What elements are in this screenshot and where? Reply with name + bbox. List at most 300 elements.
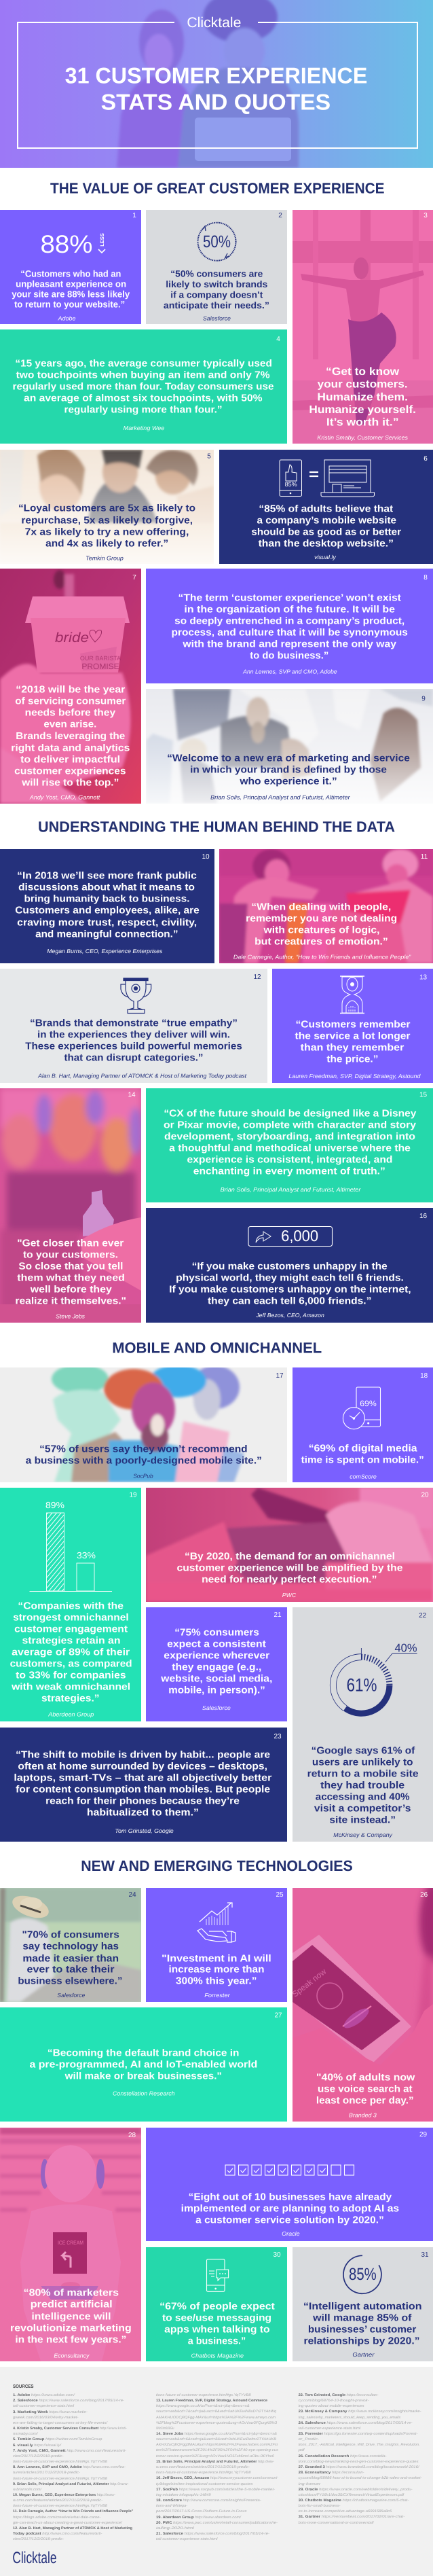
card number: 20 xyxy=(421,1492,429,1499)
panel: quote 23 xyxy=(0,1728,287,1842)
quote xyxy=(159,2302,275,2347)
card number: 17 xyxy=(276,1372,284,1380)
quote: so deeply entrenched in a company’s product, xyxy=(174,616,404,627)
quote xyxy=(169,1262,411,1307)
quote: “75% consumers xyxy=(174,1628,259,1639)
sources column 1: tions-future-of-customer-experience.html#gs.YqTYVB8 xyxy=(13,2477,107,2481)
quote: an average of almost six touchpoints, with 50% xyxy=(24,393,263,404)
quote: and 4x as likely to refer.” xyxy=(45,538,168,549)
panel: quote 26 with voice search phone photo xyxy=(290,1882,433,2122)
panel: stat 18 xyxy=(293,1367,433,1482)
quote: regularly using more than four.” xyxy=(64,405,223,416)
quote: with creatures of logic, xyxy=(263,925,380,936)
quote: “Welcome to a new era of marketing and service xyxy=(167,753,410,764)
sources column 2 xyxy=(155,2393,278,2541)
quote: 7x as likely to try a new offering, xyxy=(25,526,189,537)
quote: predict artificial xyxy=(31,2300,113,2310)
heading: new and emerging technologies: NEW AND EMERGING TECHNOLOGIES xyxy=(81,1857,353,1874)
card number: 24 xyxy=(128,1891,136,1899)
title: 31 CUSTOMER EXPERIENCE xyxy=(65,63,367,88)
attribution: Andy Yost, CMO, Gannett xyxy=(29,793,100,800)
attribution: Tom Grinsted, Google xyxy=(115,1827,174,1834)
card number: 4 xyxy=(276,336,280,343)
sources column 3: 31. Gartner https://venturebeat.com/2017/02/01/are-chat- xyxy=(299,2515,405,2519)
quote: It’s worth it.” xyxy=(326,416,399,428)
attribution: Brian Solis, Principal Analyst and Futurist, Altimeter xyxy=(221,1186,362,1193)
quote: they can each tell 6,000 friends.” xyxy=(208,1296,371,1307)
sources column 3: tail-customer-experience-stats.html xyxy=(299,2427,361,2431)
quote: reach for their phones because they’re xyxy=(45,1795,240,1806)
quote: “2018 will be the year xyxy=(16,685,126,696)
quote xyxy=(15,1238,126,1307)
quote: “Google says 61% of xyxy=(312,1745,415,1756)
quote: craving more trust, respect, civility, xyxy=(17,918,197,929)
sources column 1: tures/articles/2017/12/2/2018-predic- xyxy=(13,2471,80,2475)
sources column 1: w.cmo.com/features/articles/2017/11/2/2018-predic- xyxy=(13,2499,102,2503)
quote: to see/use messaging xyxy=(162,2313,271,2324)
sources column 1: 3. Marketing Week https://www.marketin- xyxy=(13,2410,88,2414)
card number: 16 xyxy=(419,1213,427,1220)
sources column 3: ting_sales/why_marketers_should_keep_sending_you_emails xyxy=(299,2416,401,2420)
attribution: Ann Lewnes, SVP and CMO, Adobe xyxy=(242,668,337,675)
quote xyxy=(15,871,200,940)
quote xyxy=(10,1601,132,1704)
sources column 1 xyxy=(13,2393,134,2541)
quote: but creatures of emotion.” xyxy=(255,937,388,948)
sources column 3: tionr.com/blog-news/ranking-next-gen-customer-experience-quotes xyxy=(299,2460,419,2464)
donut chart: 61% and 40%: 40% xyxy=(395,1641,417,1655)
sources column 1: 5. Temkin Group https://twitter.com/TemkinGroup xyxy=(13,2437,102,2441)
logo: Clicktale: Clicktale xyxy=(187,15,241,31)
sources column 1: 10. Megan Burns, CEO, Experience Enterprises http://www- xyxy=(13,2493,115,2497)
sources column 2: tailing-2020.html xyxy=(156,2526,195,2530)
quote xyxy=(164,268,269,310)
card number: 21 xyxy=(274,1611,282,1619)
icon: tablet held by man xyxy=(195,118,291,161)
quote: visit a competitor’s xyxy=(314,1804,411,1814)
sources column 2: 20. PWC https://www.pwc.com/us/en/retail-consumer/publications/re- xyxy=(156,2521,278,2525)
quote: they engage (e.g., xyxy=(172,1662,261,1673)
quote: average of 89% of their xyxy=(12,1647,130,1658)
panel: stat 19 xyxy=(0,1488,141,1721)
quote: likely to switch brands xyxy=(166,279,267,289)
quote xyxy=(295,1020,411,1065)
quote xyxy=(167,753,410,787)
attribution: Dale Carnegie, Author, “How to Win Friends and Influence People” xyxy=(233,953,411,960)
attribution: Jeff Bezos, CEO, Amazon xyxy=(255,1312,324,1319)
card number: 23 xyxy=(274,1733,282,1740)
attribution: Steve Jobs xyxy=(56,1312,86,1319)
quote: a business with a poorly-designed mobile site.” xyxy=(26,1456,262,1467)
title: STATS AND QUOTES xyxy=(101,90,331,115)
quote: enchanting in every moment of truth.” xyxy=(193,1166,385,1177)
quote: needs before they xyxy=(25,708,115,719)
quote: repurchase, 5x as likely to forgive, xyxy=(21,515,193,526)
sources column 2: tes%2Fkatenewsom%2F2014%2F05%2F04%2F40-eye-opening-cus xyxy=(156,2448,278,2452)
panel: quote 17 with tri-colour man photo xyxy=(0,1364,287,1482)
sources column 3: 22. Tom Grinsted, Google https://econsultan- xyxy=(299,2393,379,2397)
attribution: Aberdeen Group xyxy=(48,1711,94,1717)
sources column 1: tions-future-of-customer-experience.html#gs.YqTYVB8 xyxy=(13,2460,107,2464)
quote: in which your brand is defined by those xyxy=(190,764,387,775)
quote: strategies retain an xyxy=(22,1636,121,1647)
sources column 1: 2. Salesforce https://www.salesforce.com/blog/2017/05/14-re- xyxy=(13,2399,124,2403)
photo: crowd at networking event xyxy=(146,689,433,804)
sources column 1: tions-future-of-customer-experience.html#gs.YqTYVB8 xyxy=(13,2504,107,2508)
attribution: Brian Solis, Principal Analyst and Futurist, Altimeter xyxy=(210,793,351,800)
attribution: Alan B. Hart, Managing Partner of ATOMCK & Host of Marketing Today podcast xyxy=(37,1072,247,1079)
card number: 26 xyxy=(420,1891,428,1899)
panel: quote 21 xyxy=(146,1607,287,1721)
quote: “Eight out of 10 businesses have already xyxy=(189,2192,392,2203)
bar chart: 89% vs 33% xyxy=(30,1500,112,1591)
quote: “67% of people expect xyxy=(159,2302,275,2312)
panel: quote 15 xyxy=(146,1088,433,1202)
quote xyxy=(18,503,195,549)
quote: regularly used more than four. Today consumers use xyxy=(12,382,274,393)
quote xyxy=(26,1444,262,1467)
photo: angry man in three colour exposures xyxy=(50,1367,246,1482)
attribution: Temkin Group xyxy=(86,554,124,561)
attribution: SocPub xyxy=(133,1472,153,1479)
quote: revolutionize marketing xyxy=(10,2323,132,2334)
icon: hourglass xyxy=(340,976,364,1014)
quote: “Companies with the xyxy=(18,1601,124,1612)
quote: to do business.” xyxy=(250,651,328,662)
sources column 2: 14. Steve Jobs https://www.google.co.uk/url?sa=t&rct=j&q=&esrc=s& xyxy=(156,2432,277,2436)
quote: “Loyal customers are 5x as likely to xyxy=(18,503,195,514)
photo: hand holding phone with speak now screen xyxy=(290,1888,433,2062)
quote: well before they xyxy=(30,1285,112,1295)
quote xyxy=(160,1628,272,1696)
donut chart: 61% and 40% xyxy=(330,1641,417,1713)
quote: “Intelligent automation xyxy=(303,2302,422,2312)
quote: “Customers remember xyxy=(296,1020,411,1031)
panel: stat 29 xyxy=(146,2128,433,2241)
card number: 5 xyxy=(207,452,211,461)
attribution: Salesforce xyxy=(202,1704,231,1711)
quote: anticipate their needs.” xyxy=(164,300,269,310)
quote: return to a mobile site xyxy=(307,1769,419,1780)
sources column 1: cles/2017/12/2/2018-predic- xyxy=(13,2537,64,2541)
panel: hero header xyxy=(0,0,433,168)
photo: two women shopping for clothes xyxy=(219,849,433,963)
attribution: McKinsey & Company xyxy=(333,1831,393,1838)
quote: even arise. xyxy=(43,719,96,730)
quote: intelligence will xyxy=(31,2311,111,2322)
logo: Clicktale footer: Clicktale xyxy=(12,2549,56,2567)
sources column 1: 4. Kristin Smaby, Customer Services Consultant http://www.kristi- xyxy=(13,2427,127,2431)
panel: quote 11 with shopping photo xyxy=(219,849,433,963)
sources column 3: bots-for-small-business- xyxy=(299,2504,341,2508)
stat: 88% less: LESS xyxy=(99,233,105,247)
quote xyxy=(162,1953,271,1987)
panel: quote 7 with coffee cup photo xyxy=(0,569,141,804)
quote: if a company doesn’t xyxy=(170,289,263,300)
quote xyxy=(11,685,130,788)
panel: stat 22 xyxy=(293,1607,433,1842)
icon: phone equals laptop: 85% xyxy=(285,481,297,488)
photo: phone over payment terminal xyxy=(146,1488,433,1602)
sources column 2: 16. Jeff Bezos, CEO, Amazon http://www.myycustomer.com/communi- xyxy=(156,2476,278,2480)
card number: 29 xyxy=(419,2131,427,2139)
card number: 2 xyxy=(278,212,282,219)
quote: to deliver impactful xyxy=(20,754,120,765)
quote: mobile, in person).” xyxy=(168,1685,265,1696)
sources column 3: cy.com/blog/68986-how-ai-is-bound-to-change-b2b-sales-and-market- xyxy=(299,2476,422,2480)
quote: “Brands that demonstrate “true empathy” xyxy=(30,1018,238,1029)
quote: with weak omnichannel xyxy=(11,1682,130,1693)
cup handwriting xyxy=(55,630,121,671)
attribution: comScore xyxy=(350,1473,377,1480)
quote: "70% of consumers xyxy=(22,1930,119,1941)
quote: “80% of marketers xyxy=(24,2288,119,2299)
quote: “Get to know xyxy=(326,366,400,378)
quote: the price.” xyxy=(326,1054,378,1065)
photo: runners with water bottle xyxy=(0,1088,141,1304)
photo label: speak now: Speak now xyxy=(290,1967,328,1999)
quote: a company’s mobile website xyxy=(257,516,396,526)
sources column 3: 26. Constellation Research http://www.constella- xyxy=(299,2454,387,2458)
panel: quote 16 xyxy=(146,1208,433,1323)
card number: 12 xyxy=(253,973,261,981)
sources column 2: 13. Lauren Freedman, SVP, Digital Strategy, Astound Commerce xyxy=(156,2399,267,2403)
quote: If you make customers unhappy on the internet, xyxy=(169,1285,411,1295)
icon: phone equals laptop xyxy=(280,460,375,497)
attribution: Branded 3 xyxy=(349,2111,377,2118)
attribution: Forrester xyxy=(204,1992,231,1999)
card number: 14 xyxy=(128,1091,136,1099)
quote xyxy=(12,359,274,416)
sources column 2: w.cmo.com/features/articles/2017/11/2/2018-predic- xyxy=(156,2465,250,2469)
sources column 2: 17. SocPub https://www.socpub.com/articles/the-5-mobile-market- xyxy=(156,2488,275,2492)
sources column 2: tions-future-of-customer-experience.html#gs.YqTYVB8 xyxy=(156,2393,251,2397)
attribution: Econsultancy xyxy=(54,2352,90,2359)
sources column 2: 15. Brian Solis, Principal Analyst and Futurist, Altimeter http://ww- xyxy=(156,2460,274,2464)
sources column 2: 19. Aberdeen Group http://www.aberdeen.com/ xyxy=(156,2516,242,2520)
quote: physical world, they might each tell 6 friends. xyxy=(176,1273,404,1284)
sources column 2: tomer-service-quotes%2F&usg=AOvVaw1NO5Fxb6msI-aObv-0l0Yho0 xyxy=(156,2454,274,2458)
panel: stat 31 xyxy=(293,2247,433,2361)
donut chart: 61% and 40%: 61% xyxy=(346,1675,377,1695)
quote xyxy=(14,1749,272,1818)
quote: “If you make customers unhappy in the xyxy=(192,1262,388,1272)
quote: discussions about what it means to xyxy=(18,882,195,893)
quote: or Pixar movie, complete with character and story xyxy=(164,1120,416,1130)
quote: “Becoming the default brand choice in xyxy=(48,2047,239,2058)
card number: 1 xyxy=(132,212,136,219)
quote: "Get closer than ever xyxy=(17,1238,124,1249)
sources column 2: https://www.google.co.uk/url?sa=t&rct=j&q=&esrc=s& xyxy=(156,2404,250,2408)
quote: least once per day.” xyxy=(316,2095,414,2106)
quote: implemented or are planning to adopt AI as xyxy=(181,2204,399,2215)
quote: “15 years ago, the average consumer typically used xyxy=(15,359,272,370)
sources column 3: 25. Forrester https://go.forrester.com/wp-content/uploads/Forrest- xyxy=(299,2432,418,2436)
cup handwriting: OUR BARISTA xyxy=(80,655,121,662)
panel: quote 8 xyxy=(146,569,433,683)
attribution: Adobe xyxy=(57,315,76,321)
panel: stat 6 xyxy=(219,450,433,564)
quote: apps when talking to xyxy=(164,2325,270,2336)
photo: three friends laughing xyxy=(0,450,214,564)
panel: quote 5 with friends photo xyxy=(0,448,214,564)
icon: 85% circle: 85% xyxy=(349,2265,377,2284)
panel: stat 2 xyxy=(146,210,287,324)
attribution: Salesforce xyxy=(57,1992,86,1999)
icon: phone with chat bubble xyxy=(206,2259,229,2291)
quote: the service a lot longer xyxy=(295,1031,411,1042)
sources column 3: 27. Branded 3 https://www.branded3.com/blog/locationworld-2016/ xyxy=(299,2465,419,2469)
attribution: Marketing Wee xyxy=(124,425,165,431)
quote: customers, as compared xyxy=(10,1659,132,1670)
card number: 22 xyxy=(419,1612,427,1620)
panel: sources footer xyxy=(0,2367,433,2576)
quote: users are unlikely to xyxy=(312,1757,413,1768)
quote: “69% of digital media xyxy=(309,1444,418,1454)
quote: “The shift to mobile is driven by habit... people are xyxy=(16,1749,270,1760)
panel: quote 3 with yoga man photo xyxy=(293,210,433,444)
quote: accessing and 40% xyxy=(316,1792,410,1803)
quote: Brands leveraging the xyxy=(16,731,125,742)
sources column 2: tail-customer-experience-stats.html xyxy=(156,2537,218,2541)
quote: “CX of the future should be designed like a Disney xyxy=(164,1108,416,1119)
sources column 1: nsmaby.com/ xyxy=(13,2432,38,2436)
icon: phone and clock xyxy=(343,1387,380,1429)
sources column 1: 1. Adobe https://www.adobe.com/ xyxy=(13,2393,75,2397)
sources column 3: bots-more-conversational-or-controversial/ xyxy=(299,2521,374,2525)
sources column 1: 8. Ann Lewnes, SVP and CMO, Adobe http://www.cmo.com/fea- xyxy=(13,2465,126,2469)
panel: quote 25 xyxy=(146,1888,287,2002)
card number: 7 xyxy=(132,574,136,582)
quote: customer engagement xyxy=(14,1624,128,1635)
quote: strategies.” xyxy=(41,1694,100,1704)
icon: microphone xyxy=(317,1983,343,2009)
quote: and meaningful connection.” xyxy=(35,929,178,940)
sources column 2: pers/2017/2017-US-Cross-Platform-Future-in-Focus xyxy=(155,2509,247,2514)
sources column 2: tions-and-Whitepa- xyxy=(156,2504,187,2508)
quote: that can disrupt categories.” xyxy=(64,1053,204,1064)
sources column 2: ing-mistakes-infographic-14849 xyxy=(156,2493,211,2497)
panel: quote 4 xyxy=(0,329,287,444)
quote: use voice search at xyxy=(318,2083,413,2094)
photo: man in yoga pose xyxy=(293,210,433,444)
sources column 3 xyxy=(297,2393,422,2525)
sources column 1: https://blogs.adobe.com/creative/what-dale-carne- xyxy=(13,2516,101,2520)
sources column 3: 24. Salesforce https://www.salesforce.com/blog/2017/05/14-re- xyxy=(299,2421,413,2425)
quote: laptops, smart-TVs – that are all objectively better xyxy=(14,1772,272,1783)
quote: a customer service solution by 2020.” xyxy=(195,2215,384,2226)
title xyxy=(65,63,367,115)
quote: Humanize them. xyxy=(317,391,408,403)
quote xyxy=(309,366,416,428)
icon: 85% circle xyxy=(343,2255,381,2293)
quote: experience wherever xyxy=(164,1651,270,1662)
card number: 6 xyxy=(423,455,428,463)
robot sign label: ICE CREAM xyxy=(58,2240,83,2246)
bar chart: 89% vs 33%: 89% xyxy=(45,1500,64,1510)
quote: "40% of adults now xyxy=(316,2072,415,2083)
sources column 2: 9Wz3Xm6tJ8GIu xyxy=(156,2427,174,2431)
frame border xyxy=(18,22,417,148)
card number: 19 xyxy=(129,1492,137,1499)
quote xyxy=(176,1551,403,1585)
icon: dotted 50% circle xyxy=(198,223,236,261)
quote: “50% consumers are xyxy=(170,268,263,279)
quote: they had trouble xyxy=(320,1781,404,1791)
panel: quote 12 xyxy=(0,969,267,1083)
icon: straw hat xyxy=(10,1891,52,1922)
quote: often at home surrounded by devices – desktops, xyxy=(18,1761,267,1772)
quote xyxy=(30,2047,257,2081)
quote xyxy=(251,503,401,550)
quote: These experiences build powerful memories xyxy=(25,1041,242,1052)
quote xyxy=(18,1930,122,1987)
sources column 1: ers-are-failing-to-target-consumers-at-key-life-events/ xyxy=(13,2421,108,2425)
quote: customer experience will be amplified by the xyxy=(176,1562,403,1573)
quote: in the experiences they deliver will win. xyxy=(37,1030,230,1041)
sources column 2: 21. Salesforce https://www.salesforce.com/blog/2017/05/14-re- xyxy=(156,2532,269,2536)
quote: to 33% for companies xyxy=(16,1670,126,1681)
quote: should be as good as or better xyxy=(251,526,401,537)
panel: quote 9 with networking crowd photo xyxy=(146,689,433,804)
quote: Customers and employees, alike, are xyxy=(15,906,200,916)
attribution: Salesforce xyxy=(203,315,231,321)
sources column 3: 23. McKinsey & Company http://www.mckinsey.com/insights/marke- xyxy=(299,2410,421,2414)
quote: website, social media, xyxy=(160,1674,272,1685)
sources column 1: tail-customer-experience-stats.html xyxy=(13,2404,75,2408)
sources column 1: 12. Alan B. Hart, Managing Partner of ATOMCK & Host of Marketing xyxy=(13,2526,132,2530)
quote: ever to take their xyxy=(27,1965,115,1975)
attribution: Oracle xyxy=(282,2230,300,2237)
quote: in the next few years.” xyxy=(15,2335,126,2346)
sources column 3: cy.com/blog/68764-10-thought-provok- xyxy=(299,2399,369,2403)
quote: increase more than xyxy=(168,1965,265,1975)
sources column 2: source=web&cd=6&cad=rja&uact=8&ved=0ahUKEwiDefmr2TYAhUKB xyxy=(156,2437,276,2441)
photo: two people looking at a tablet xyxy=(116,0,300,168)
panel: quote 27 xyxy=(0,2007,287,2122)
quote: remember you are not dealing xyxy=(246,914,397,925)
quote: process, and culture that it will be synonymous xyxy=(171,628,408,639)
sources column 2: 18. comScore http://www.comscore.com/Insights/Presenta- xyxy=(156,2499,261,2503)
quote: your customers. xyxy=(318,379,408,391)
quote xyxy=(10,2288,132,2346)
sources column 2: AMAKHUODCj8QFgg-MAY&url=https%3A%2F%2Fwww.ameyo.com xyxy=(155,2416,276,2420)
quote: for content consumption than mobiles. But people xyxy=(16,1784,270,1795)
heading: understanding the human behind the data: UNDERSTANDING THE HUMAN BEHIND THE DATA xyxy=(38,819,395,836)
photo: coffee cup with handwritten bride xyxy=(0,569,132,804)
card number: 15 xyxy=(419,1091,427,1099)
sources column 2: tions-future-of-customer-experience.html#gs.YqTYVB8 xyxy=(156,2471,251,2475)
sources column 3: 30. Chatbots Magazine https://chatbotsmagazine.com/5-chat- xyxy=(299,2499,409,2503)
sources column 1: 11. Dale Carnegie, Author “How to Win Friends and Influence People” xyxy=(13,2509,134,2514)
sources column 1: 6. visual.ly https://visual.ly/ xyxy=(13,2444,62,2448)
icon: growth chart above robotic hand xyxy=(197,1903,236,1942)
quote: them what they need xyxy=(17,1273,125,1284)
sources column 2: source=web&cd=7&cad=rja&uact=8&ved=0ahUKEwiN8uD7r2TYAhWq xyxy=(156,2410,276,2414)
bar chart: 89% vs 33%: 33% xyxy=(77,1550,96,1560)
quote: business elsewhere.” xyxy=(18,1976,122,1987)
quote xyxy=(303,2302,422,2347)
heading: the value of great customer experience: THE VALUE OF GREAT CUSTOMER EXPERIENCE xyxy=(50,180,385,197)
cup handwriting: bride xyxy=(55,630,89,645)
quote: site instead.” xyxy=(329,1815,396,1826)
icon: dotted 50% circle: 50% xyxy=(203,232,231,251)
stat: 88% less: 88% xyxy=(41,230,92,258)
quote: experience is consistent, integrated, and xyxy=(187,1154,392,1165)
sources column 1: 9. Brian Solis, Principal Analyst and Futurist, Altimeter http://www- xyxy=(13,2482,129,2486)
quote xyxy=(246,902,397,948)
heading: mobile and omnichannel: MOBILE AND OMNICHANNEL xyxy=(112,1339,322,1356)
